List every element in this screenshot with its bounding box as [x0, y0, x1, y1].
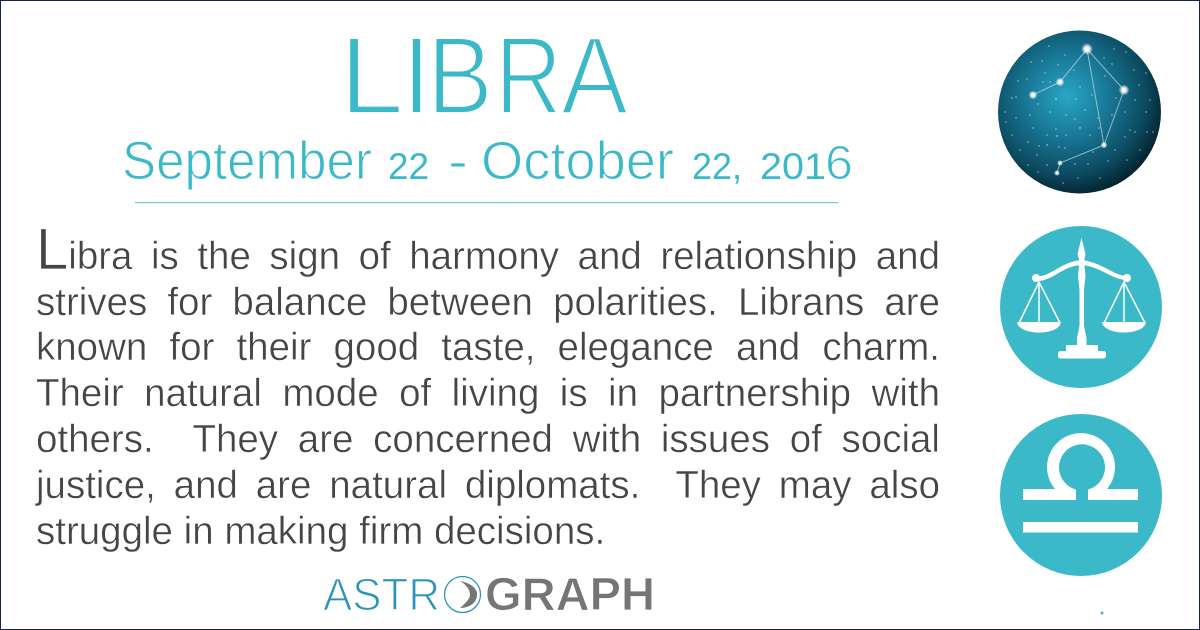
logo: Astrograph: ASTR [323, 569, 440, 620]
date range [122, 131, 853, 191]
body text: Libra is the sign of harmony and relationship and [36, 217, 940, 282]
date range: 22 [388, 146, 429, 187]
date range: 22, [692, 146, 742, 187]
body text: others. They are concerned with issues of social [36, 418, 940, 461]
title: B [427, 14, 493, 138]
title: I [401, 14, 432, 138]
heading rule [135, 202, 838, 203]
body text: Their natural mode of living is in partnership with [36, 372, 940, 415]
date range: September [122, 131, 372, 191]
logo: Astrograph: GRAPH [485, 568, 655, 620]
date range: - [448, 131, 468, 191]
title: L [339, 14, 404, 138]
icon: libra glyph [1000, 414, 1162, 576]
icon: scales [1000, 226, 1162, 388]
body text: justice, and are natural diplomats. They may also [36, 464, 940, 507]
title [339, 14, 629, 138]
date range: 201 [760, 146, 826, 187]
logo: Astrograph [323, 568, 655, 620]
body text [35, 217, 940, 553]
icon: constellation globe [998, 30, 1161, 194]
body text: struggle in making firm decisions. [36, 510, 605, 553]
date range: October [481, 131, 674, 191]
title: R [495, 14, 562, 138]
date range: 6 [825, 137, 853, 190]
body text: known for their good taste, elegance and charm. [36, 326, 940, 369]
body text: strives for balance between polarities. Librans are [36, 281, 940, 324]
small teal dot [1100, 612, 1104, 614]
title: A [561, 14, 629, 138]
